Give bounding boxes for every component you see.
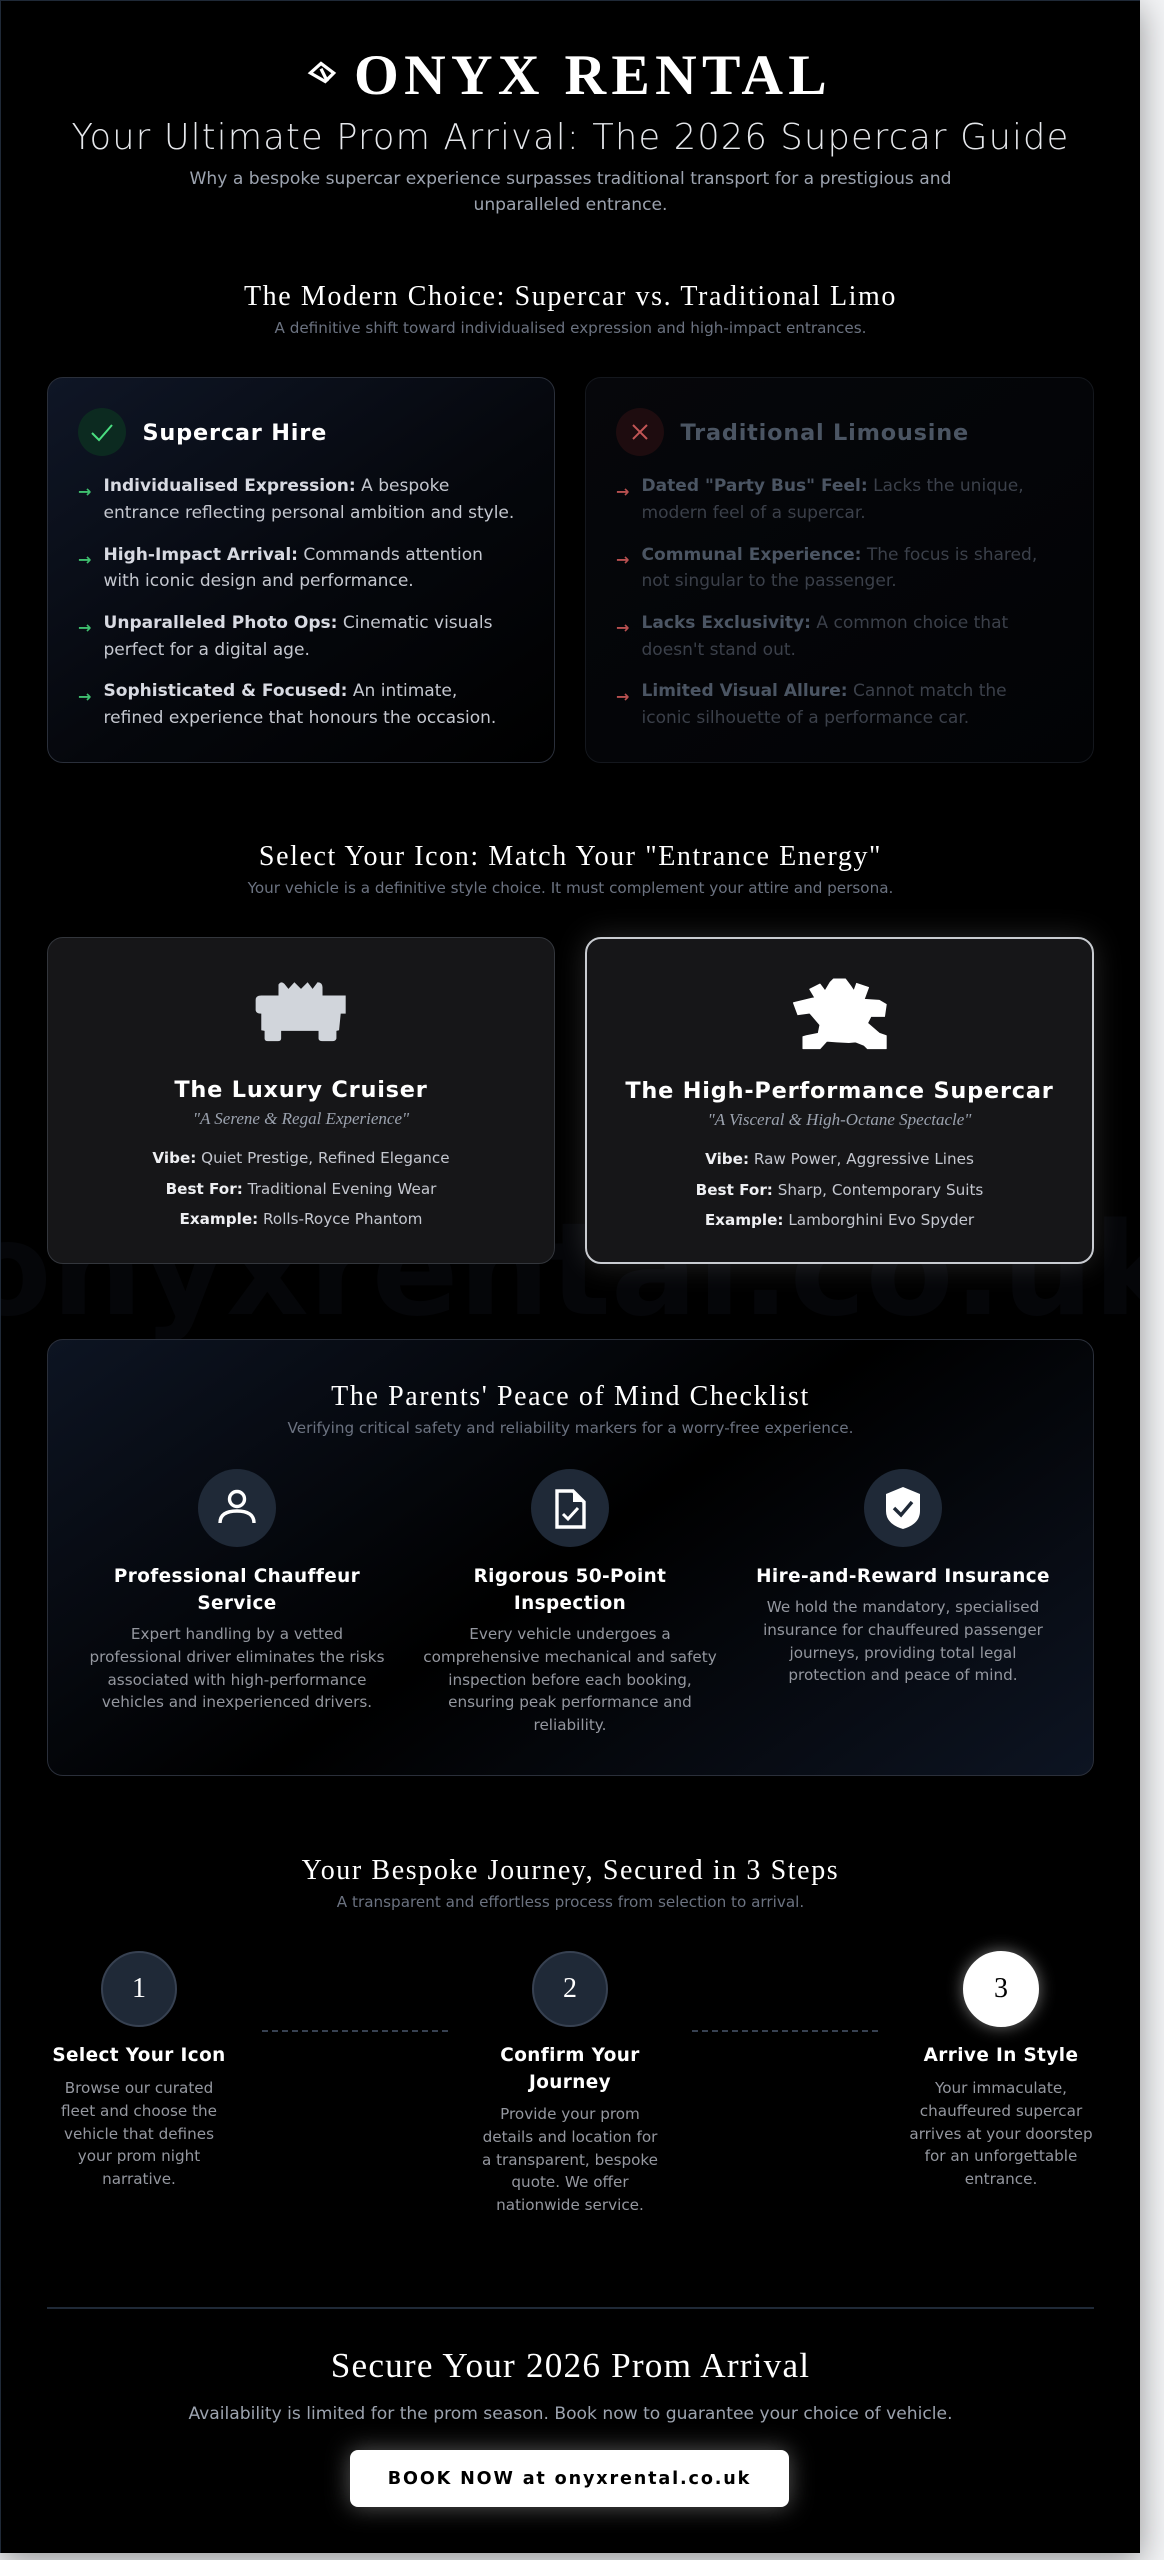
step text: arrives at your doorstep bbox=[909, 2125, 1093, 2143]
item text: reliability. bbox=[534, 1716, 606, 1734]
section heading: select icon: Select Your Icon: Match Your "Entrance Energy" bbox=[259, 841, 882, 872]
item text: associated with high-performance bbox=[108, 1671, 366, 1689]
item text: ensuring peak performance and bbox=[448, 1693, 692, 1711]
panel: traditional limousine bbox=[585, 377, 1094, 763]
step text: narrative. bbox=[102, 2170, 176, 2188]
benefit: → bbox=[78, 618, 91, 637]
step text: a transparent, bespoke bbox=[482, 2151, 658, 2169]
item title: Rigorous 50-Point bbox=[474, 1566, 666, 1587]
item text: journeys, providing total legal bbox=[790, 1644, 1016, 1662]
section heading: modern choice: The Modern Choice: Supercar vs. Traditional Limo bbox=[244, 281, 897, 312]
step text: Browse our curated bbox=[65, 2079, 213, 2097]
example: Example: Rolls-Royce Phantom bbox=[180, 1210, 422, 1228]
intro text: Why a bespoke supercar experience surpasses traditional transport for a prestigious and bbox=[190, 169, 951, 189]
section heading: journey: Your Bespoke Journey, Secured in 3 Steps bbox=[302, 1855, 839, 1886]
tagline: "A Visceral & High-Octane Spectacle" bbox=[708, 1110, 971, 1129]
panel: high-performance supercar bbox=[585, 937, 1094, 1264]
item title bbox=[474, 1566, 666, 1614]
benefit: Unparalleled Photo Ops: Cinematic visuals bbox=[104, 613, 493, 633]
best for: Best For: Sharp, Contemporary Suits bbox=[696, 1181, 983, 1199]
item text: Every vehicle undergoes a bbox=[469, 1625, 671, 1643]
icon: luxury car bbox=[256, 982, 346, 1042]
drawback bbox=[616, 476, 1024, 523]
item title: Service bbox=[197, 1593, 277, 1614]
benefit: Sophisticated & Focused: An intimate, bbox=[104, 681, 457, 701]
step text: details and location for bbox=[483, 2128, 657, 2146]
step text: chauffeured supercar bbox=[920, 2102, 1082, 2120]
footer divider bbox=[47, 2307, 1094, 2309]
panel title: Traditional Limousine bbox=[680, 420, 969, 446]
step number: 1 bbox=[132, 1973, 146, 2004]
drawback: doesn't stand out. bbox=[642, 640, 796, 660]
item text: professional driver eliminates the risks bbox=[90, 1648, 384, 1666]
drawback: not singular to the passenger. bbox=[642, 571, 897, 591]
benefit: perfect for a digital age. bbox=[104, 640, 310, 660]
step text: your prom night bbox=[78, 2147, 200, 2165]
drawback bbox=[616, 613, 1008, 660]
benefit bbox=[78, 681, 496, 728]
step title: Confirm Your bbox=[500, 2045, 640, 2066]
step text: for an unforgettable bbox=[925, 2147, 1077, 2165]
step text: vehicle that defines bbox=[64, 2125, 214, 2143]
vibe: Vibe: Quiet Prestige, Refined Elegance bbox=[152, 1149, 450, 1167]
step 2 bbox=[482, 1951, 658, 2214]
step text: Provide your prom bbox=[500, 2105, 640, 2123]
panel title: Supercar Hire bbox=[142, 420, 327, 446]
item title: Professional Chauffeur bbox=[114, 1566, 360, 1587]
drawback: Lacks Exclusivity: A common choice that bbox=[642, 613, 1008, 633]
panel subheading: Verifying critical safety and reliability markers for a worry-free experience. bbox=[288, 1419, 853, 1437]
drawback bbox=[616, 681, 1007, 728]
drawback: Limited Visual Allure: Cannot match the bbox=[642, 681, 1007, 701]
main subtitle: Your Ultimate Prom Arrival: The 2026 Supercar Guide bbox=[72, 117, 1069, 158]
drawback: iconic silhouette of a performance car. bbox=[642, 708, 969, 728]
drawback: Communal Experience: The focus is shared, bbox=[642, 545, 1037, 565]
benefit: High-Impact Arrival: Commands attention bbox=[104, 545, 483, 565]
section subheading: modern choice: A definitive shift toward individualised expression and high-impact entrances. bbox=[274, 319, 866, 337]
step title bbox=[500, 2045, 640, 2093]
intro text bbox=[190, 169, 951, 215]
item text: inspection before each booking, bbox=[448, 1671, 692, 1689]
item text bbox=[90, 1625, 384, 1711]
example: Example: Lamborghini Evo Spyder bbox=[705, 1211, 974, 1229]
column: insurance bbox=[756, 1469, 1050, 1684]
panel heading: The Parents' Peace of Mind Checklist bbox=[331, 1381, 810, 1412]
step text: entrance. bbox=[965, 2170, 1037, 2188]
item text: vehicles and inexperienced drivers. bbox=[102, 1693, 372, 1711]
intro text: unparalleled entrance. bbox=[474, 195, 667, 215]
item text bbox=[763, 1598, 1043, 1684]
step number: 2 bbox=[563, 1973, 577, 2004]
step title: Select Your Icon bbox=[52, 2045, 226, 2066]
step number bbox=[963, 1951, 1039, 2027]
drawback: Dated "Party Bus" Feel: Lacks the unique, bbox=[642, 476, 1024, 496]
step text bbox=[909, 2079, 1093, 2188]
item text: protection and peace of mind. bbox=[788, 1666, 1018, 1684]
step 3 bbox=[909, 1940, 1093, 2188]
item title: Hire-and-Reward Insurance bbox=[756, 1566, 1050, 1587]
benefit bbox=[78, 476, 514, 523]
item text: Expert handling by a vetted bbox=[131, 1625, 343, 1643]
section subheading: select icon: Your vehicle is a definitive style choice. It must complement your attire and persona. bbox=[248, 879, 893, 897]
footer heading: Secure Your 2026 Prom Arrival bbox=[331, 2346, 810, 2385]
benefit: with iconic design and performance. bbox=[104, 571, 414, 591]
icon: diamond logo bbox=[308, 61, 336, 84]
call to action button bbox=[350, 2450, 789, 2507]
tagline: "A Serene & Regal Experience" bbox=[193, 1109, 409, 1128]
benefit: refined experience that honours the occasion. bbox=[104, 708, 496, 728]
icon: person bbox=[198, 1469, 276, 1547]
step number: 3 bbox=[994, 1973, 1008, 2004]
icon: shield bbox=[864, 1469, 942, 1547]
benefit bbox=[78, 613, 493, 660]
step text: Your immaculate, bbox=[935, 2079, 1067, 2097]
column: inspection bbox=[423, 1469, 717, 1734]
icon: cross bbox=[616, 408, 664, 456]
item title bbox=[114, 1566, 360, 1614]
step title: Arrive In Style bbox=[924, 2045, 1078, 2066]
panel: luxury cruiser bbox=[47, 937, 555, 1264]
header logo bbox=[308, 44, 832, 107]
panel: supercar hire bbox=[47, 377, 555, 763]
call to action button: BOOK NOW at onyxrental.co.uk bbox=[388, 2469, 751, 2489]
item title: Inspection bbox=[514, 1593, 626, 1614]
footer text: Availability is limited for the prom season. Book now to guarantee your choice of vehicle. bbox=[188, 2404, 953, 2424]
drawback: → bbox=[616, 618, 629, 637]
step text: fleet and choose the bbox=[61, 2102, 217, 2120]
panel: parents checklist bbox=[47, 1339, 1094, 1776]
benefit: entrance reflecting personal ambition and style. bbox=[104, 503, 514, 523]
step title: Journey bbox=[529, 2072, 611, 2093]
item text: We hold the mandatory, specialised bbox=[767, 1598, 1039, 1616]
step text: quote. We offer bbox=[511, 2173, 629, 2191]
benefit: → bbox=[78, 482, 91, 500]
item text: comprehensive mechanical and safety bbox=[423, 1648, 717, 1666]
column: chauffeur bbox=[90, 1469, 384, 1711]
step 1 bbox=[52, 1951, 226, 2188]
benefit: → bbox=[78, 550, 91, 569]
card title: The High-Performance Supercar bbox=[625, 1078, 1054, 1104]
best for: Best For: Traditional Evening Wear bbox=[166, 1180, 436, 1198]
icon: document check bbox=[531, 1469, 609, 1547]
drawback: → bbox=[616, 686, 629, 706]
step number bbox=[101, 1951, 177, 2027]
connector: step 2 to 3 bbox=[692, 2030, 878, 2032]
step text bbox=[61, 2079, 217, 2188]
step number bbox=[532, 1951, 608, 2027]
benefit: → bbox=[78, 686, 91, 706]
icon: check bbox=[78, 408, 126, 456]
section subheading: journey: A transparent and effortless process from selection to arrival. bbox=[337, 1893, 804, 1911]
step text bbox=[482, 2105, 658, 2214]
benefit: Individualised Expression: A bespoke bbox=[104, 476, 449, 496]
item text: insurance for chauffeured passenger bbox=[763, 1621, 1043, 1639]
drawback: → bbox=[616, 550, 629, 569]
drawback: modern feel of a supercar. bbox=[642, 503, 866, 523]
vibe: Vibe: Raw Power, Aggressive Lines bbox=[705, 1150, 974, 1168]
drawback bbox=[616, 545, 1037, 591]
connector: step 1 to 2 bbox=[262, 2030, 448, 2032]
icon: supercar bbox=[792, 978, 887, 1050]
brand name: ONYX RENTAL bbox=[354, 44, 832, 107]
item text bbox=[423, 1625, 717, 1734]
step text: nationwide service. bbox=[496, 2196, 644, 2214]
benefit bbox=[78, 545, 483, 591]
drawback: → bbox=[616, 482, 629, 500]
card title: The Luxury Cruiser bbox=[174, 1077, 428, 1103]
